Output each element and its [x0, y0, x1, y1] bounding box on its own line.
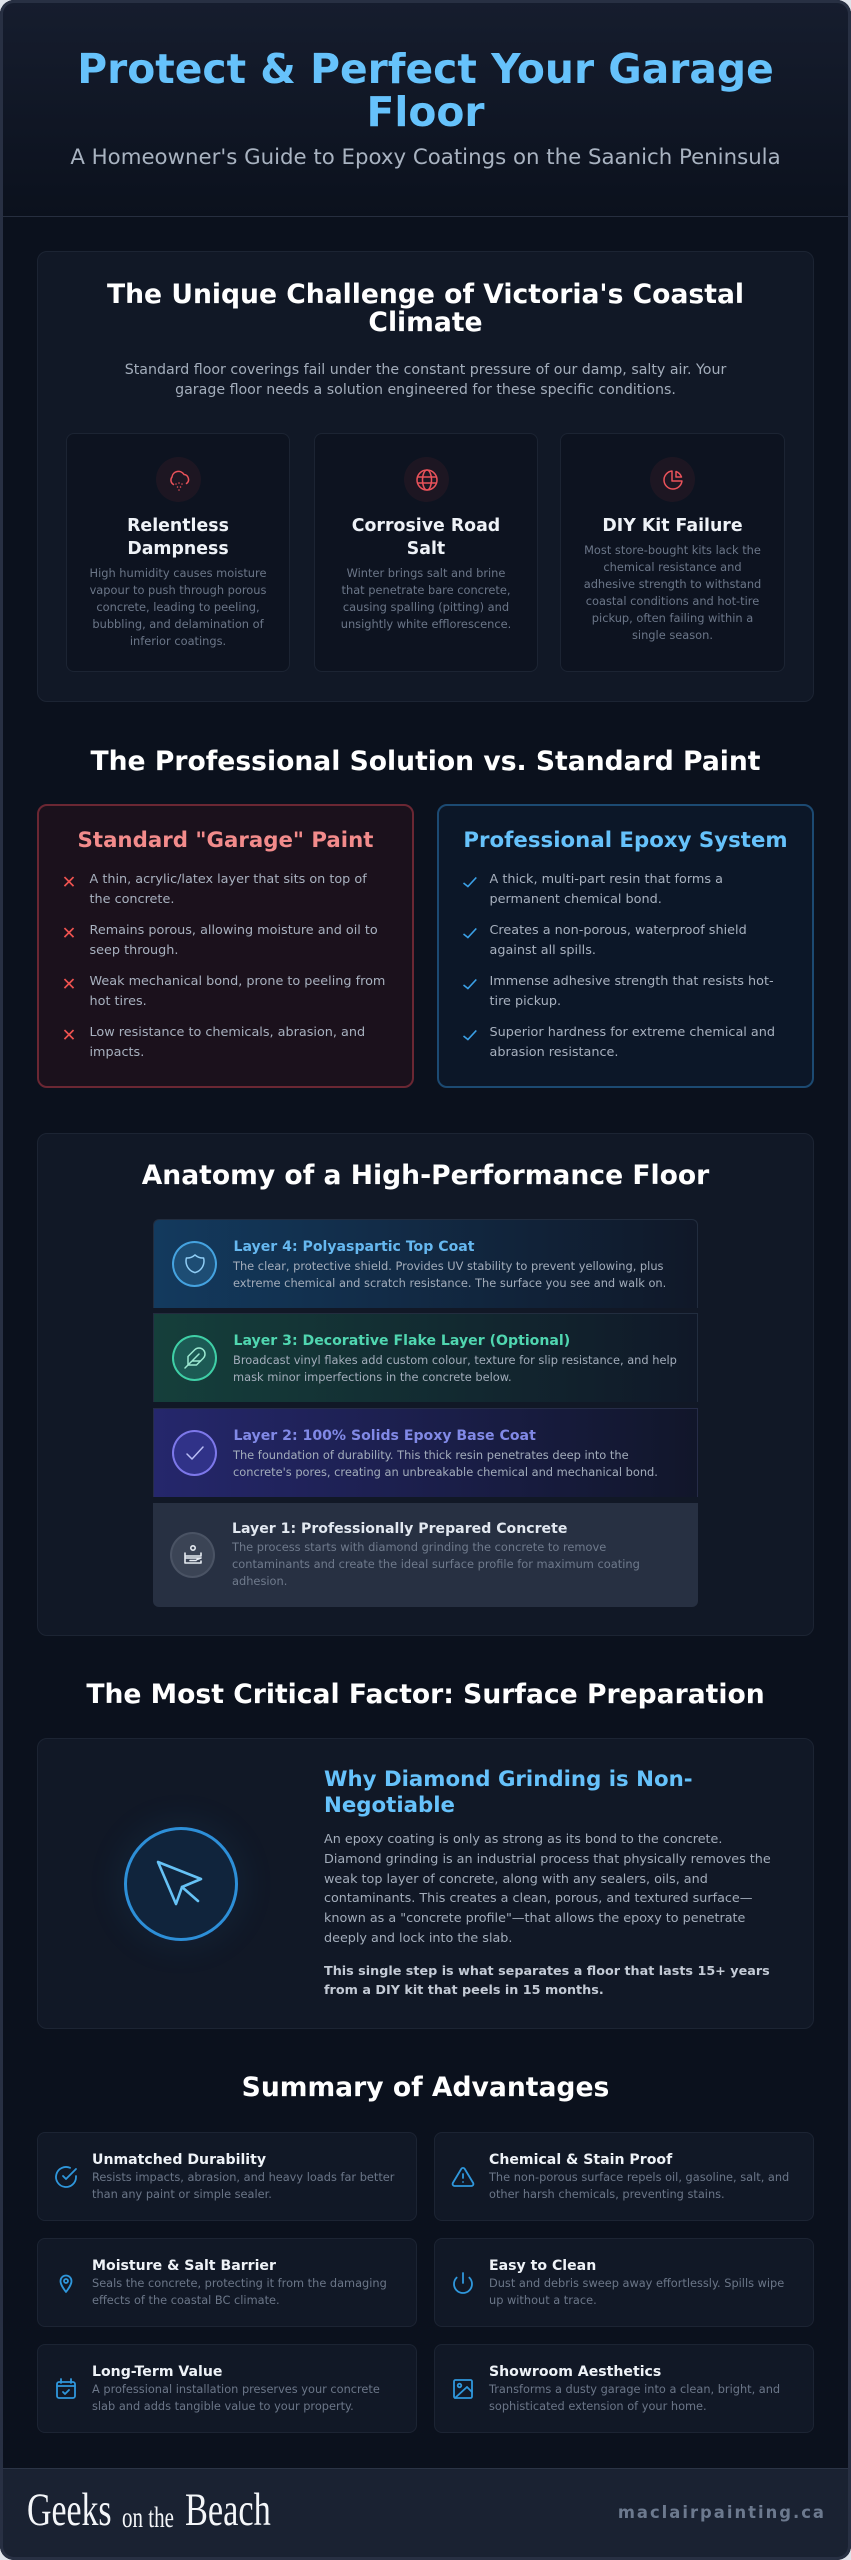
icon: globe: [404, 457, 449, 502]
card text: effects of the coastal BC climate.: [92, 2292, 280, 2306]
layer text: adhesion.: [232, 1574, 287, 1588]
bold takeaway: This single step is what separates a floor that lasts 15+ years: [324, 1964, 770, 1978]
layer text: The process starts with diamond grinding the concrete to remove: [232, 1540, 606, 1554]
card text: chemical resistance and: [603, 560, 742, 574]
layer title: Layer 3: Decorative Flake Layer (Optional): [234, 1333, 570, 1349]
logo wordmark: on the: [122, 2501, 174, 2534]
card title: [352, 516, 500, 559]
section subtitle: [324, 1767, 693, 1818]
card title: Salt: [407, 539, 445, 559]
icon: warning triangle: [452, 2167, 474, 2187]
list item: [62, 923, 378, 958]
card title: Corrosive Road: [352, 516, 500, 536]
list item: impacts.: [90, 1045, 144, 1060]
list item: ✕: [62, 873, 76, 893]
panel: standard garage paint: [37, 804, 414, 1088]
heading: anatomy: Anatomy of a High-Performance Floor: [142, 1160, 709, 1191]
list item: [62, 872, 367, 907]
title: Floor: [366, 88, 485, 136]
card text: single season.: [632, 628, 713, 642]
card text: that penetrate bare concrete,: [342, 583, 510, 597]
card title: Long-Term Value: [92, 2364, 222, 2380]
list item: Low resistance to chemicals, abrasion, and: [90, 1025, 365, 1040]
list item: seep through.: [90, 943, 178, 958]
card: easy to clean: [434, 2238, 814, 2327]
body text: deeply and lock into the slab.: [324, 1931, 512, 1946]
card title: Showroom Aesthetics: [489, 2364, 661, 2380]
icon: pie chart: [650, 457, 695, 502]
panel title: Professional Epoxy System: [463, 828, 788, 853]
card text: adhesive strength to withstand: [584, 577, 761, 591]
card text: Transforms a dusty garage into a clean, bright, and: [489, 2382, 780, 2396]
list item: [463, 1025, 775, 1060]
list item: Immense adhesive strength that resists hot-: [490, 974, 774, 989]
card text: concrete, leading to peeling,: [96, 600, 260, 614]
layer title: Layer 1: Professionally Prepared Concrete: [232, 1521, 567, 1537]
card text: [92, 2276, 387, 2306]
list item: A thick, multi-part resin that forms a: [490, 872, 723, 887]
layer 3: [153, 1313, 698, 1402]
card: moisture and salt barrier: [37, 2238, 417, 2327]
card text: [489, 2276, 784, 2306]
logo wordmark: Beach: [185, 2484, 271, 2536]
card text: bubbling, and delamination of: [92, 617, 264, 631]
list item: permanent chemical bond.: [490, 892, 662, 907]
list item: [463, 974, 774, 1009]
icon: pointer in glowing circle: [124, 1827, 238, 1941]
list item: Superior hardness for extreme chemical and: [490, 1025, 775, 1040]
section subtitle: Negotiable: [324, 1793, 455, 1818]
intro text: [125, 362, 726, 398]
icon: image: [453, 2379, 473, 2399]
body text: An epoxy coating is only as strong as its bond to the concrete.: [324, 1832, 722, 1847]
heading: professional solution: The Professional Solution vs. Standard Paint: [90, 746, 761, 777]
card text: pickup, often failing within a: [592, 611, 753, 625]
subtitle: A Homeowner's Guide to Epoxy Coatings on the Saanich Peninsula: [70, 144, 781, 170]
card text: inferior coatings.: [130, 634, 226, 648]
layer text: [232, 1448, 658, 1478]
intro text: garage floor needs a solution engineered for these specific conditions.: [175, 382, 676, 398]
layer text: [233, 1352, 677, 1384]
intro text: Standard floor coverings fail under the constant pressure of our damp, salty air. Your: [125, 362, 726, 378]
panel: professional epoxy system: [437, 804, 814, 1088]
card: DIY kit failure: [560, 433, 785, 672]
layer text: The clear, protective shield. Provides UV stability to prevent yellowing, plus: [233, 1258, 663, 1272]
icon: feather: [172, 1335, 217, 1381]
body text: Diamond grinding is an industrial process that physically removes the: [324, 1852, 771, 1867]
icon: check circle: [55, 2166, 77, 2188]
layer title: Layer 4: Polyaspartic Top Coat: [234, 1239, 475, 1255]
list item: [62, 1025, 365, 1060]
card text: sophisticated extension of your home.: [489, 2398, 707, 2412]
heading: summary of advantages: Summary of Advantages: [242, 2072, 609, 2103]
icon: check: [172, 1430, 217, 1476]
panel: anatomy of a floor: [37, 1133, 814, 1636]
card text: causing spalling (pitting) and: [343, 600, 509, 614]
icon: power: [453, 2272, 473, 2294]
heading: coastal challenge: The Unique Challenge of Victoria's Coastal: [107, 278, 744, 310]
panel: coastal climate challenge: [37, 251, 814, 702]
card text: Seals the concrete, protecting it from the damaging: [92, 2276, 387, 2290]
card text: A professional installation preserves your concrete: [92, 2382, 380, 2396]
card text: other harsh chemicals, preventing stains.: [489, 2186, 725, 2200]
website: maclairpainting.ca: [618, 2503, 826, 2522]
body text: [324, 1832, 771, 1946]
title: Protect & Perfect Your Garage: [77, 45, 774, 93]
layer title: Layer 2: 100% Solids Epoxy Base Coat: [234, 1428, 536, 1444]
panel title: Standard "Garage" Paint: [78, 828, 373, 853]
layer 1: [153, 1503, 698, 1607]
card title: Relentless: [127, 516, 229, 536]
icon: shield: [172, 1241, 217, 1287]
icon: cloud with drizzle: [156, 457, 201, 502]
section subtitle: Why Diamond Grinding is Non-: [324, 1767, 693, 1792]
card title: Easy to Clean: [489, 2258, 596, 2274]
list item: the concrete.: [90, 892, 174, 907]
card text: [584, 543, 761, 642]
layer text: The foundation of durability. This thick resin penetrates deep into the: [233, 1448, 629, 1462]
card text: Most store-bought kits lack the: [584, 543, 761, 557]
title: [77, 45, 774, 136]
list item: [463, 923, 747, 958]
layer text: mask minor imperfections in the concrete below.: [233, 1370, 512, 1384]
card title: DIY Kit Failure: [602, 516, 743, 536]
body text: weak top layer of concrete, along with any sealers, oils, and: [324, 1872, 708, 1887]
body text: contaminants. This creates a clean, porous, and textured surface—: [324, 1891, 753, 1906]
bold takeaway: [324, 1964, 770, 1998]
card title: Unmatched Durability: [92, 2152, 266, 2168]
list item: Remains porous, allowing moisture and oil to: [90, 923, 378, 938]
card text: Winter brings salt and brine: [347, 566, 505, 580]
layer text: [232, 1540, 640, 1588]
list item: A thin, acrylic/latex layer that sits on top of: [90, 872, 367, 887]
card text: [489, 2382, 780, 2412]
card text: [489, 2170, 789, 2200]
card text: Resists impacts, abrasion, and heavy loads far better: [92, 2170, 394, 2184]
card text: The non-porous surface repels oil, gasoline, salt, and: [489, 2170, 789, 2184]
list item: against all spills.: [490, 943, 596, 958]
layer text: contaminants and create the ideal surface profile for maximum coating: [232, 1557, 640, 1571]
card text: [90, 566, 266, 648]
card text: unsightly white efflorescence.: [341, 617, 511, 631]
layer text: concrete's pores, creating an unbreakable chemical and mechanical bond.: [233, 1464, 658, 1478]
layer text: Broadcast vinyl flakes add custom colour, texture for slip resistance, and help: [233, 1352, 677, 1366]
layer text: [232, 1258, 666, 1290]
card title: [127, 516, 229, 559]
heading: coastal challenge: [107, 278, 744, 338]
layer text: extreme chemical and scratch resistance. The surface you see and walk on.: [233, 1276, 666, 1290]
card text: Dust and debris sweep away effortlessly. Spills wipe: [489, 2276, 784, 2290]
card: unmatched durability: [37, 2132, 417, 2221]
logo wordmark: Geeks: [27, 2484, 112, 2536]
list item: ✕: [62, 975, 76, 995]
layer 4: [153, 1219, 698, 1308]
card title: Chemical & Stain Proof: [489, 2152, 672, 2168]
card text: High humidity causes moisture: [90, 566, 266, 580]
card text: slab and adds tangible value to your property.: [92, 2398, 354, 2412]
card: long-term value: [37, 2344, 417, 2433]
bold takeaway: from a DIY kit that peels in 15 months.: [324, 1983, 604, 1998]
icon: map pin: [60, 2274, 72, 2293]
card text: [92, 2382, 380, 2412]
card text: vapour to push through porous: [90, 583, 266, 597]
card title: Moisture & Salt Barrier: [92, 2258, 276, 2274]
card text: [92, 2170, 394, 2200]
list item: Weak mechanical bond, prone to peeling from: [90, 974, 385, 989]
icon: prepared concrete: [170, 1532, 215, 1578]
body text: known as a "concrete profile"—that allows the epoxy to penetrate: [324, 1911, 745, 1926]
icon: calendar check: [56, 2378, 76, 2399]
heading: surface preparation: The Most Critical Factor: Surface Preparation: [86, 1679, 765, 1710]
card: relentless dampness: [66, 433, 290, 672]
card text: [341, 566, 511, 631]
list item: [463, 872, 723, 907]
list item: tire pickup.: [490, 994, 561, 1009]
card: showroom aesthetics: [434, 2344, 814, 2433]
list item: [62, 974, 385, 1009]
header: [0, 0, 851, 217]
list item: ✕: [62, 924, 76, 944]
layer 2: [153, 1408, 698, 1497]
panel: diamond grinding: [37, 1738, 814, 2029]
heading: coastal challenge: Climate: [368, 307, 483, 338]
card text: up without a trace.: [489, 2292, 597, 2306]
card text: than any paint or simple sealer.: [92, 2186, 272, 2200]
list item: Creates a non-porous, waterproof shield: [490, 923, 747, 938]
list item: abrasion resistance.: [490, 1045, 618, 1060]
logo wordmark: [27, 2484, 271, 2536]
footer: [0, 2468, 851, 2560]
list item: ✕: [62, 1026, 76, 1046]
card: chemical and stain proof: [434, 2132, 814, 2221]
card text: coastal conditions and hot-tire: [586, 594, 759, 608]
list item: hot tires.: [90, 994, 147, 1009]
card: corrosive road salt: [314, 433, 538, 672]
card title: Dampness: [127, 539, 229, 559]
